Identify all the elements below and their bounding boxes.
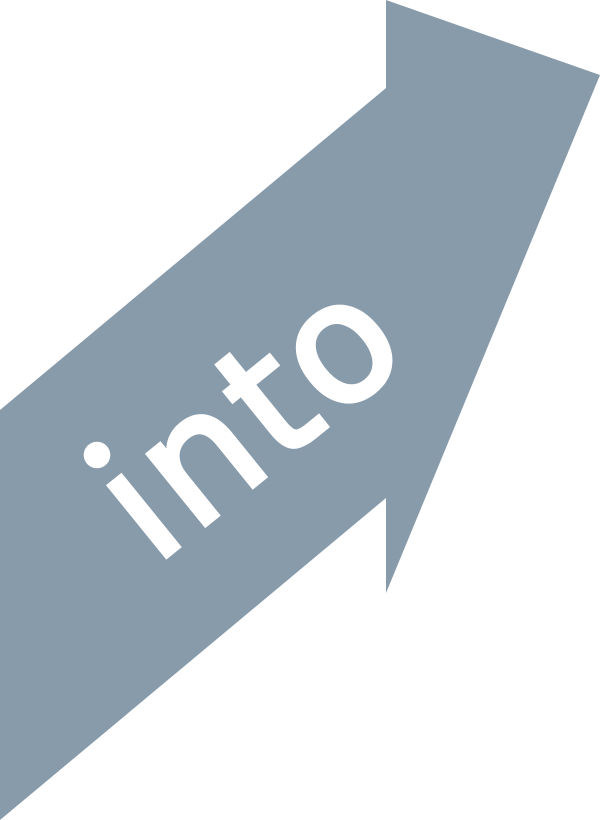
mask over the square dot of the i [78,438,118,478]
round dot of the i [84,442,110,468]
label: into: into [58,236,441,597]
